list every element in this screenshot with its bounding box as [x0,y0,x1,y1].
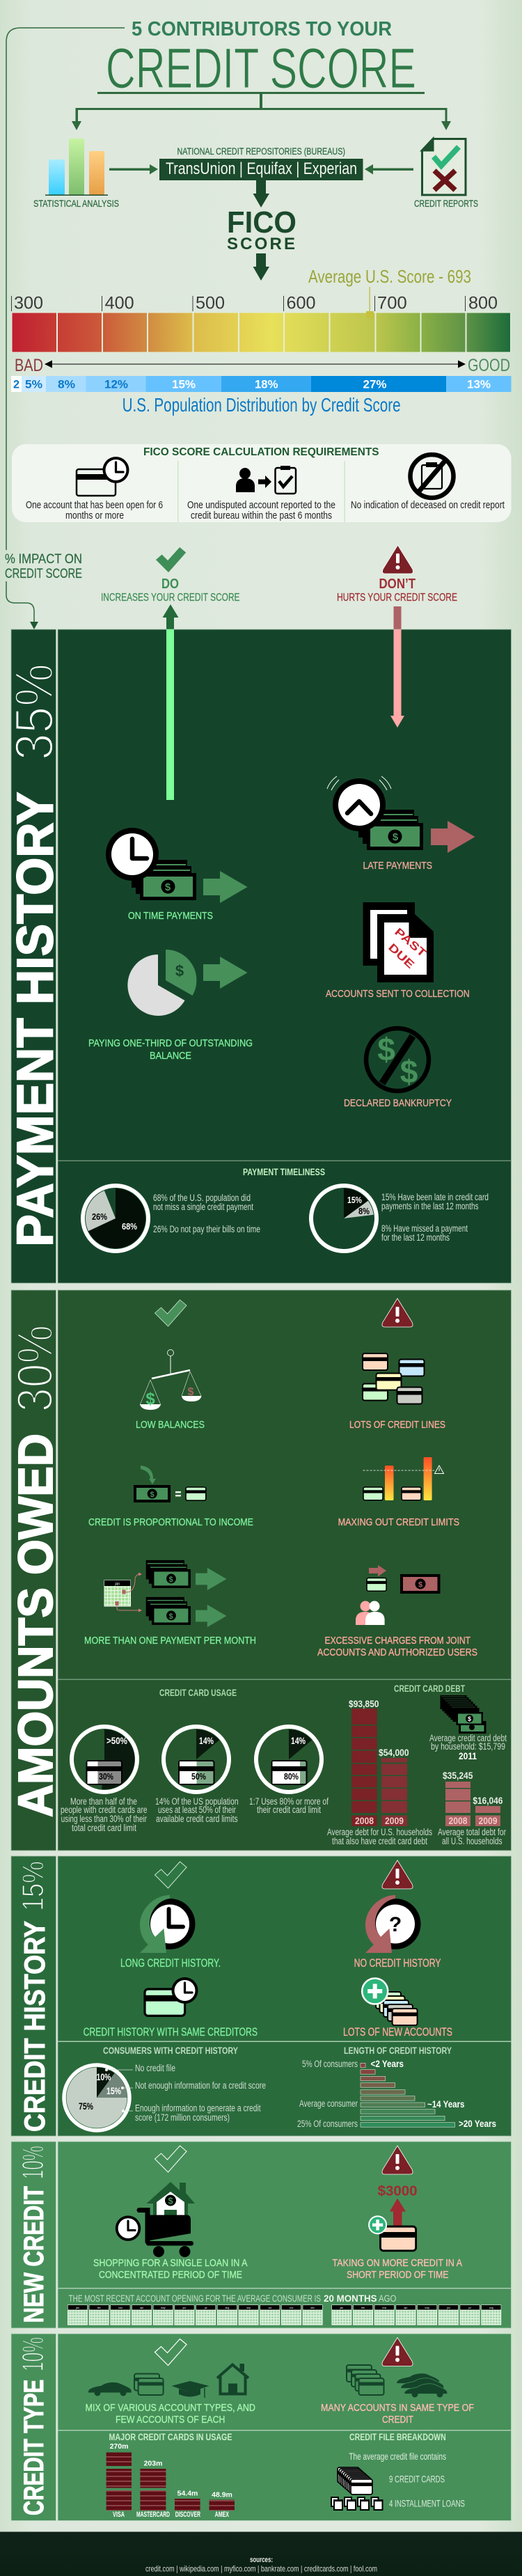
score axis labels: 700 [377,294,407,313]
icon: warning [382,2146,413,2174]
pie chart: payers: 26% [92,1212,107,1222]
statistical analysis label: STATISTICAL ANALYSIS [33,198,119,209]
text: late payers stats: 8% Have missed a payment [381,1223,468,1234]
bar chart: debt for all households: 2009 [479,1816,497,1826]
bad to good scale: GOOD [468,356,510,375]
usage pie: 50%: 14% [199,1736,214,1746]
pie chart: late payers: 15% [347,1195,362,1205]
bar chart: major credit cards: VISA [113,2511,125,2519]
item: maxing out credit limits: MAXING OUT CREDIT LIMITS [338,1516,459,1528]
bar chart: debt for households with card debt [349,1699,409,1826]
item: no credit history: ? [389,1913,402,1936]
bar chart: major credit cards: 203m [144,2460,162,2468]
requirement one text: months or more [65,510,124,521]
item: accounts sent to collection [326,902,470,1000]
population distribution bar: 5% [25,377,42,391]
item: excessive charges: EXCESSIVE CHARGES FROM JOINT [324,1635,470,1647]
usage captions: uses at least 50% of their [158,1805,236,1815]
panel: FICO calculation requirements [12,444,511,522]
debt captions: that also have credit card debt [332,1836,427,1846]
icon: check [155,1862,187,1888]
item: long credit history: LONG CREDIT HISTORY. [120,1956,221,1970]
item: many accounts same type: CREDIT [382,2414,413,2426]
item: mix of account types: FEW ACCOUNTS OF EACH [116,2414,225,2426]
bar chart labels [297,2059,496,2129]
pie chart: late payers: 8% [358,1207,370,1216]
bar chart: major credit cards: AMEX [215,2511,229,2519]
requirement one text [26,500,163,521]
dont heading: DON’T [379,576,416,592]
icon: check [155,2146,187,2172]
item: declared bankruptcy: $ [400,1053,418,1090]
usage captions: people with credit cards are [61,1805,148,1815]
arrow: do upward [166,629,174,800]
calendars: 20 months: sep [246,2307,251,2309]
impact label: % IMPACT ON [5,552,82,567]
text: late payers stats [381,1192,489,1243]
item: paying one third: PAYING ONE-THIRD OF OUTSTANDING [88,1037,253,1049]
calendars: 20 months: apr [404,2307,408,2309]
calendars: 20 months: aug [489,2307,493,2309]
calendars: 20 months: jun [446,2307,450,2309]
item: more than one payment per month: $ [168,1612,173,1621]
calendars: 20 months: jun [182,2307,186,2309]
FICO score logo: SCORE [227,235,295,253]
requirement two text [187,500,335,521]
item: maxing out credit limits [338,1457,459,1528]
months sentence: 20 MONTHS [324,2293,377,2304]
pie legend text: Not enough information for a credit score [135,2080,266,2091]
population distribution bar: 18% [255,377,278,391]
item: no credit history [354,1895,441,1970]
item: low balances: $ [145,1390,155,1408]
average debt text: 2011 [459,1751,477,1761]
average score label: Average U.S. Score - 693 [308,266,471,287]
usage pie: 50% [164,1727,229,1792]
pie chart: consumers with credit history: 10% [96,2072,111,2082]
impact label [5,552,82,581]
panel: credit history 15% [11,1856,511,2136]
item: on time payments: ON TIME PAYMENTS [128,911,213,922]
item: excessive charges: ACCOUNTS AND AUTHORIZED USERS [317,1647,477,1658]
tree arrows [72,92,451,130]
requirement one text: One account that has been open for 6 [26,500,163,511]
item: many accounts same type: MANY ACCOUNTS IN SAME TYPE OF [321,2402,474,2414]
bar chart labels: >20 Years [459,2119,496,2129]
pie chart: late payers [311,1186,377,1251]
payment timeliness heading: PAYMENT TIMELINESS [243,1167,325,1177]
usage pie: over 50%: 30% [99,1772,113,1782]
arrow: reports to bureaus [365,164,413,174]
bar chart: major credit cards: 270m [110,2442,128,2451]
text: late payers stats: for the last 12 months [381,1232,450,1243]
icon: statistical analysis bars [45,139,108,196]
score axis labels: 400 [105,294,134,313]
percent 15: 15% [16,1861,50,1911]
calendars: 20 months: nov [290,2307,294,2309]
item: more than one payment per month: $ [168,1576,173,1584]
debt captions [327,1827,506,1846]
usage pie: 80%: 80% [284,1772,299,1782]
bar chart: debt for households with card debt: $54,000 [379,1748,409,1758]
bar chart: debt for all households: 2008 [448,1816,468,1826]
percent 10: 10% [16,2146,50,2179]
average debt text [429,1733,507,1761]
sidebar [8,1290,63,1851]
score axis labels: 300 [14,294,43,313]
pie legend text: No credit file [135,2063,175,2073]
bar chart: major credit cards: 48.9m [212,2490,232,2499]
item: credit proportional to income: CREDIT IS PROPORTIONAL TO INCOME [88,1516,253,1528]
calendars: 20 months: apr [140,2307,144,2309]
panel: new credit 10% [11,2142,511,2328]
bar chart: debt for all households: $35,245 [443,1770,473,1781]
percent 35: 35% [3,663,64,760]
icon: pile of money: $ [468,1715,471,1722]
dont heading: HURTS YOUR CREDIT SCORE [337,592,457,604]
calendars: 20 months: jul [468,2307,471,2309]
panel: credit type 10% [11,2334,511,2520]
pie chart: consumers with credit history [64,2065,133,2130]
sidebar title: NEW CREDIT [19,2186,49,2323]
bar chart labels: 25% Of consumers [297,2119,358,2129]
bureaus box: TransUnion | Equifax | Experian [166,159,357,178]
item: same creditors [84,1977,258,2039]
item: late payments: LATE PAYMENTS [363,861,432,872]
item: taking more credit: TAKING ON MORE CREDIT IN A [333,2257,462,2269]
arrow: impact to panel [6,581,38,629]
major cards heading: MAJOR CREDIT CARDS IN USAGE [109,2432,232,2442]
dont heading [337,545,457,604]
item: accounts sent to collection: DUE [386,941,416,971]
calendars: 20 months: mar [382,2307,387,2309]
pie chart: consumers with credit history: 15% [106,2086,121,2096]
text: payers stats: not miss a single credit payment [153,1202,253,1212]
sidebar [11,1856,56,2136]
item: on time payments [106,828,248,922]
item: more than one payment per month [84,1560,256,1647]
sources list: credit.com | wikipedia.com | myfico.com | bankrate.com | creditcards.com | fool.com [145,2563,377,2573]
calendars: 20 months: oct [268,2307,271,2309]
calendars: 20 months: aug [225,2307,229,2309]
consumers heading: CONSUMERS WITH CREDIT HISTORY [103,2045,238,2056]
text: payers stats: 26% Do not pay their bills on time [153,1224,260,1234]
credit reports label: CREDIT REPORTS [414,198,478,209]
arrow stub: dont [394,606,401,629]
item: many accounts same type [321,2365,474,2426]
bar chart labels: Average consumer [299,2098,358,2109]
calendars: 20 months [68,2305,501,2325]
calendars: 20 months: jan [75,2307,79,2309]
icon: warning [382,1860,413,1889]
sidebar title: CREDIT TYPE [19,2380,49,2515]
item: low balances [136,1349,205,1431]
icon: check [155,2339,187,2366]
score axis labels: 600 [287,294,316,313]
item: same creditors: CREDIT HISTORY WITH SAME CREDITORS [84,2025,258,2039]
icon: warning [382,1298,413,1327]
item: more than one payment per month: MORE THAN ONE PAYMENT PER MONTH [84,1635,256,1647]
arrow: bureaus to FICO [253,180,269,207]
pie chart: payers: 68% [122,1222,137,1232]
bar chart: major credit cards: 54.4m [177,2490,198,2498]
text: late payers stats: 15% Have been late in credit card [381,1192,489,1202]
population distribution bar: 8% [58,377,75,391]
icon: card and clock [77,457,129,496]
text: payers stats [153,1193,260,1234]
score axis labels [11,294,498,313]
item: declared bankruptcy [344,1028,452,1109]
percent 10: 10% [16,2337,50,2371]
bureaus heading: NATIONAL CREDIT REPOSITORIES (BUREAUS) [177,146,345,157]
icon: nine credit cards [338,2467,372,2495]
usage pie: 80%: 14% [291,1736,306,1746]
item: on time payments: $ [165,881,171,893]
item: taking more credit [333,2184,462,2281]
bar chart: major credit cards: MASTERCARD [136,2511,170,2519]
item: taking more credit: $3000 [378,2184,418,2199]
distribution caption: U.S. Population Distribution by Credit Score [122,394,401,416]
item: new accounts [343,1979,452,2039]
percent 30: 30% [8,1325,63,1412]
population distribution bar: 13% [467,377,491,391]
score gradient bar [12,311,511,352]
sidebar [11,2334,56,2520]
item: declared bankruptcy: $ [377,1031,395,1067]
item: shopping for a loan [93,2182,248,2281]
bar chart: debt for households with card debt: 2009 [385,1816,404,1826]
item: accounts sent to collection: ACCOUNTS SENT TO COLLECTION [326,988,470,1000]
item: shopping for a loan: CONCENTRATED PERIOD OF TIME [99,2269,242,2281]
item: mix of account types [85,2364,255,2426]
calendars: 20 months: feb [97,2307,101,2309]
do heading: INCREASES YOUR CREDIT SCORE [101,592,239,604]
bar chart: debt for all households [443,1770,503,1826]
item: lots of credit lines: LOTS OF CREDIT LINES [349,1419,445,1431]
usage pie: 50%: 50% [191,1772,206,1782]
item: excessive charges: $ [418,1580,422,1589]
arrow: FICO to scale [253,253,269,281]
calendars: 20 months: mar [118,2307,123,2309]
bar chart: major credit cards: DISCOVER [175,2511,200,2519]
item: excessive charges [317,1565,477,1658]
item: shopping for a loan: $ [168,2196,173,2206]
title [106,18,416,100]
credit file intro: The average credit file contains [349,2451,446,2462]
bar chart: debt for all households: $16,046 [473,1796,503,1806]
text: payers stats: 68% of the U.S. population did [153,1193,251,1203]
score axis labels: 500 [196,294,225,313]
calendars: 20 months: jul [204,2307,207,2309]
do heading [101,547,239,604]
footer [0,2531,522,2576]
debt captions: Average debt for U.S. households [327,1827,432,1837]
score axis labels: 800 [468,294,498,313]
credit file heading: CREDIT FILE BREAKDOWN [349,2432,446,2442]
arrow: statistics to bureaus [109,164,158,174]
item: shopping for a loan: SHOPPING FOR A SINGLE LOAN IN A [93,2257,248,2269]
usage captions: available credit card limits [156,1814,238,1824]
item: credit proportional to income: $ [150,1491,155,1499]
item: long credit history [120,1895,221,1970]
sidebar title: AMOUNTS OWED [8,1434,63,1817]
usage captions: 1:7 Uses 80% or more of [249,1796,329,1807]
item: lots of credit lines [349,1353,445,1431]
pie legend text: score (172 million consumers) [135,2112,230,2123]
item: credit proportional to income [88,1466,253,1528]
installment loans label: 4 INSTALLMENT LOANS [389,2498,465,2509]
item: declared bankruptcy: DECLARED BANKRUPTCY [344,1097,452,1109]
bar chart: debt for households with card debt: $93,850 [349,1699,379,1709]
arrow stub: do [163,604,178,629]
pie chart: payers [83,1186,148,1251]
usage pie: over 50% [72,1727,137,1792]
usage captions: total credit card limit [72,1823,136,1833]
item: taking more credit: SHORT PERIOD OF TIME [347,2269,448,2281]
population distribution bar: 15% [172,377,196,391]
item: late payments [327,776,475,872]
arrow: dont downward [390,629,404,728]
item: mix of account types: MIX OF VARIOUS ACCOUNT TYPES, AND [85,2402,255,2414]
item: paying one third [88,950,253,1062]
population distribution bar: 27% [363,377,387,391]
pie legend text [135,2063,266,2123]
requirements heading: FICO SCORE CALCULATION REQUIREMENTS [143,446,379,458]
months sentence: THE MOST RECENT ACCOUNT OPENING FOR THE AVERAGE CONSUMER IS [69,2293,321,2304]
pie chart: consumers with credit history: 75% [79,2101,93,2112]
sidebar title: PAYMENT HISTORY [7,792,64,1247]
usage captions [61,1796,329,1833]
usage captions: More than half of the [70,1796,137,1807]
icon: person to clipboard [236,466,296,494]
item: no credit history: NO CREDIT HISTORY [354,1956,441,1970]
bar chart labels: <2 Years [370,2059,404,2069]
usage pie: over 50%: >50% [106,1736,127,1746]
requirement two text: credit bureau within the past 6 months [191,510,332,521]
do heading: DO [161,576,179,592]
bar chart: major credit cards [106,2442,235,2519]
bad to good scale: BAD [15,356,43,375]
item: paying one third: $ [175,962,184,980]
calendars: 20 months: dec [310,2307,315,2309]
bad to good scale [15,356,510,375]
calendars: 20 months: feb [361,2307,365,2309]
calendars: 20 months: may [161,2307,166,2309]
nine credit cards label: 9 CREDIT CARDS [389,2474,445,2485]
FICO score logo: FICO [227,205,296,239]
header bracket line [6,28,125,550]
calendars: 20 months: may [425,2307,429,2309]
credit card usage heading: CREDIT CARD USAGE [159,1688,237,1698]
item: new accounts: LOTS OF NEW ACCOUNTS [343,2025,452,2039]
population distribution bar: 2 [13,377,19,391]
bar chart labels: ~14 Years [427,2099,465,2110]
icon: no deceased indication [411,455,454,498]
icon: pile of money [440,1695,486,1734]
text: late payers stats: payments in the last 12 months [381,1201,479,1211]
item: paying one third: BALANCE [150,1050,191,1062]
icon: check [155,1300,187,1326]
panel: payment history 35% [3,629,511,1283]
item: late payments: $ [393,831,399,843]
bar chart labels: 5% Of consumers [302,2059,358,2069]
calendars: 20 months: jan [340,2307,343,2309]
usage captions: 14% Of the US population [155,1796,239,1807]
item: accounts sent to collection: PAST [392,926,429,960]
population distribution bar [11,376,511,392]
item: low balances: LOW BALANCES [136,1419,205,1431]
population distribution bar: 12% [104,377,128,391]
impact label: CREDIT SCORE [5,567,82,581]
sidebar [3,629,64,1283]
length heading: LENGTH OF CREDIT HISTORY [344,2045,452,2056]
sidebar title: CREDIT HISTORY [18,1921,51,2132]
panel: amounts owed 30% [8,1290,511,1851]
usage pie: 80% [256,1727,322,1792]
sidebar [11,2142,56,2328]
sources heading: sources: [250,2556,273,2564]
item: low balances: $ [188,1386,194,1398]
debt captions: all U.S. households [442,1836,503,1846]
credit card debt heading: CREDIT CARD DEBT [394,1683,466,1694]
icon: warning [382,2338,413,2366]
months sentence: AGO [379,2293,396,2304]
bar chart: debt for households with card debt: 2008 [355,1816,374,1826]
pie legend text: Enough information to generate a credit [135,2103,261,2114]
usage captions: using less than 30% of their [61,1814,147,1824]
title line one: 5 CONTRIBUTORS TO YOUR [132,18,392,40]
item: more than one payment per month: jan [114,1582,120,1586]
bar chart: length of credit history [361,2063,455,2127]
icon: four installment loans [331,2497,383,2511]
requirement two text: One undisputed account reported to the [187,500,335,511]
FICO score logo [227,205,296,253]
icon: credit report [422,139,466,195]
usage captions: their credit card limit [257,1805,321,1815]
